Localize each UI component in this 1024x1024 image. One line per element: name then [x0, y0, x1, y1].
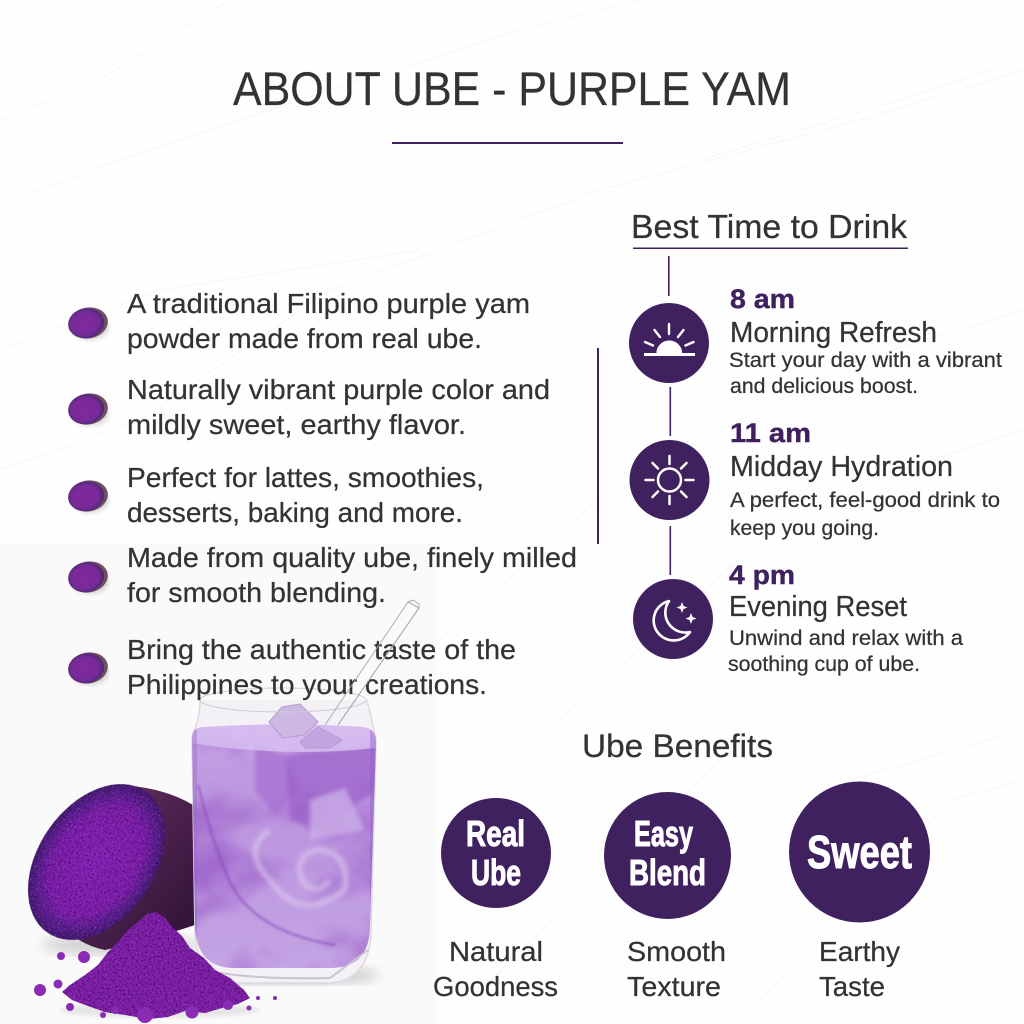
icon: moon and stars [633, 579, 713, 659]
fact 2: Naturally vibrant purple color and [127, 374, 550, 405]
heading: Best Time to Drink [631, 208, 908, 245]
benefit: sweet [789, 782, 930, 1002]
timeline connector [668, 256, 671, 575]
fact 5: Bring the authentic taste of the [127, 634, 516, 665]
time block: midday: keep you going. [730, 516, 879, 540]
time block: midday [730, 418, 1000, 540]
benefit: real ube: Ube [471, 852, 521, 893]
heading: Ube Benefits [582, 728, 773, 764]
benefit: real ube: Goodness [433, 971, 558, 1002]
time block: evening: 4 pm [729, 560, 795, 590]
fact 2 [66, 374, 550, 440]
icon: midday sun [630, 440, 710, 520]
time block: midday: Midday Hydration [730, 451, 953, 483]
fact 4 [66, 542, 577, 608]
fact 2: mildly sweet, earthy flavor. [127, 409, 466, 440]
benefit: easy blend: Blend [629, 852, 706, 893]
benefit: sweet: Sweet [807, 826, 912, 878]
benefit: real ube: Natural [449, 936, 543, 967]
time block: evening [728, 560, 963, 676]
time block: morning: Start your day with a vibrant [729, 348, 1002, 372]
fact 5 [66, 634, 516, 700]
time block: morning [729, 284, 1002, 398]
time block: evening: soothing cup of ube. [728, 652, 920, 676]
powder pile [34, 912, 277, 1023]
purple yam [0, 758, 200, 966]
photo: ube glass, yam and powder [0, 688, 380, 1023]
benefit: easy blend: Texture [627, 971, 721, 1002]
glass rim [200, 688, 366, 712]
glass straw [325, 600, 419, 725]
fact 1 [66, 288, 530, 354]
fact 4: for smooth blending. [127, 577, 386, 608]
section: best time to drink [629, 208, 1002, 676]
fact 3: Perfect for lattes, smoothies, [127, 462, 484, 493]
fact 1: A traditional Filipino purple yam [127, 288, 530, 319]
fact 3: desserts, baking and more. [127, 497, 463, 528]
benefit: easy blend: Easy [634, 813, 693, 854]
glass of ube latte [190, 700, 380, 984]
icon: sunrise [629, 303, 709, 383]
title: ABOUT UBE - PURPLE YAM [233, 62, 791, 115]
fact 1: powder made from real ube. [127, 323, 482, 354]
benefit: easy blend: Smooth [627, 936, 726, 967]
fact 5: Philippines to your creations. [127, 669, 487, 700]
benefit: sweet: Earthy [819, 936, 900, 967]
benefit: easy blend [604, 792, 731, 1002]
time block: evening: Evening Reset [729, 591, 907, 623]
photo backdrop panel [0, 543, 437, 1024]
list: ube facts [66, 288, 577, 700]
benefit: sweet: Taste [819, 971, 885, 1002]
section: ube benefits [433, 728, 930, 1002]
fact 4: Made from quality ube, finely milled [127, 542, 577, 573]
time block: midday: 11 am [730, 418, 811, 448]
benefit: real ube [433, 798, 558, 1002]
benefit: real ube: Real [466, 813, 525, 854]
time block: evening: Unwind and relax with a [729, 626, 963, 650]
fact 3 [66, 462, 484, 528]
time block: morning: Morning Refresh [730, 317, 937, 349]
column divider [597, 348, 599, 544]
time block: midday: A perfect, feel-good drink to [730, 488, 1000, 512]
time block: morning: and delicious boost. [730, 374, 918, 398]
time block: morning: 8 am [730, 284, 795, 314]
ice cubes [269, 704, 342, 748]
